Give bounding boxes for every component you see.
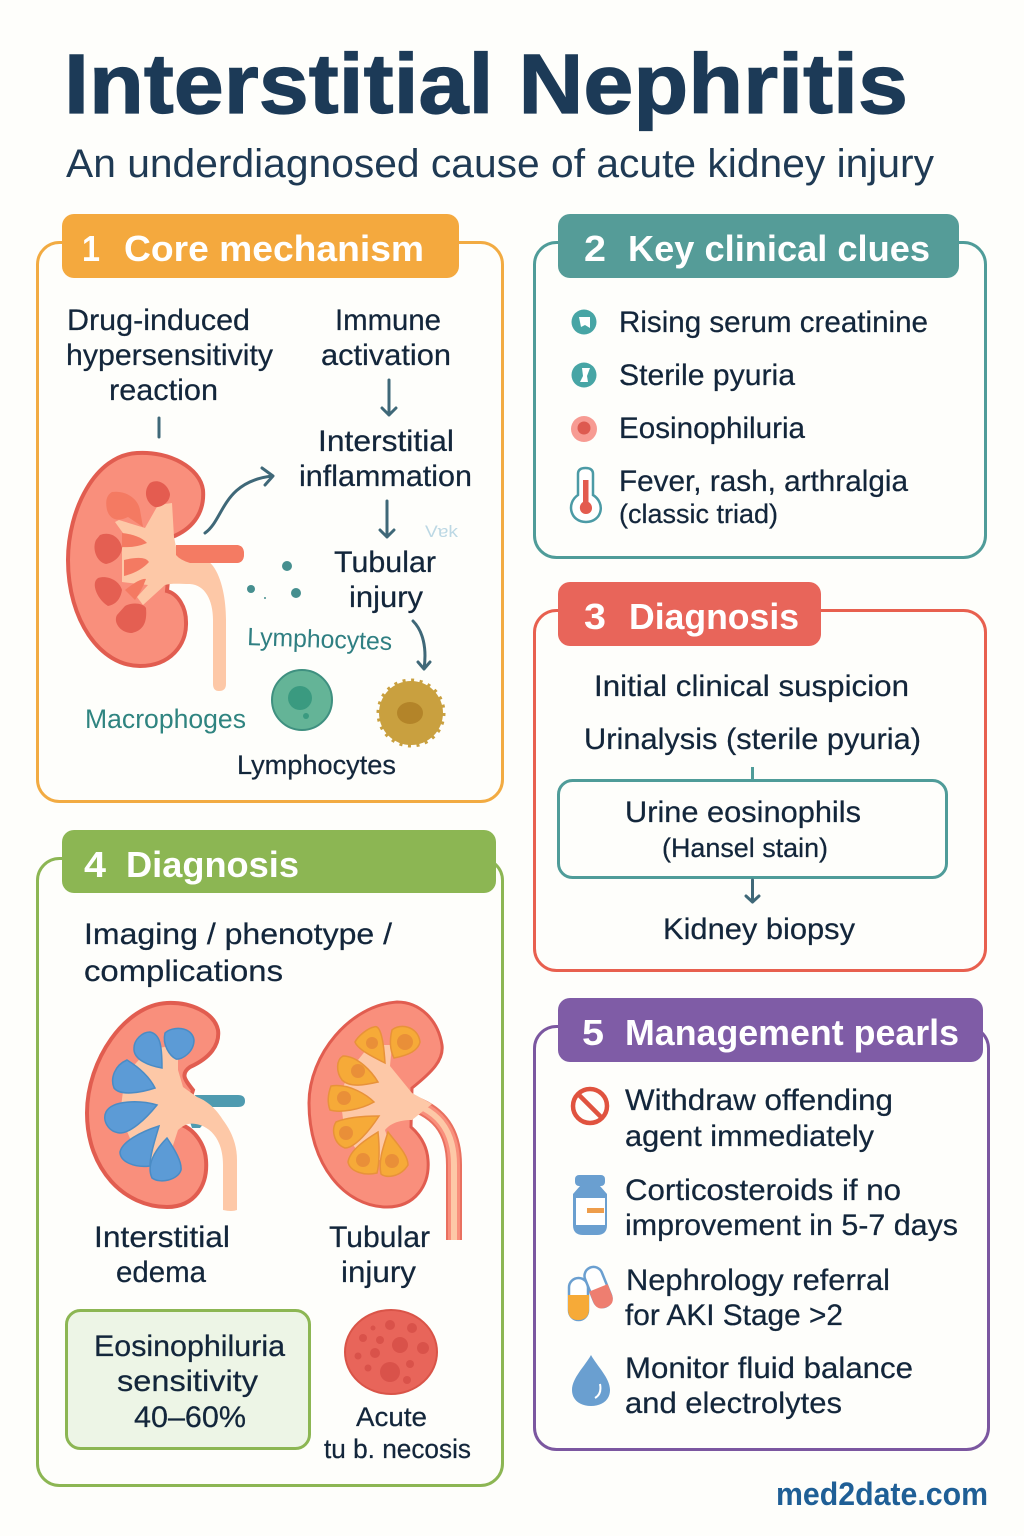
label: interstitial edema: edema <box>116 1256 206 1289</box>
text: imaging phenotype complications: complications <box>84 955 283 988</box>
panel: core mechanism <box>38 214 502 802</box>
icon: water drop <box>572 1355 610 1406</box>
heading: core mechanism: 1 <box>82 228 100 269</box>
label: acute tubular necrosis: tu b. necosis <box>324 1434 471 1464</box>
heading: management pearls <box>558 998 983 1062</box>
icon: thermometer <box>571 468 601 522</box>
clue: fever, rash, arthralgia: (classic triad) <box>619 499 778 529</box>
heading: diagnosis <box>62 830 496 893</box>
label: tubular injury: Tubular <box>329 1221 430 1254</box>
pearl: monitor fluid balance: and electrolytes <box>625 1387 842 1420</box>
connector stroke <box>751 767 754 780</box>
heading: diagnosis: Diagnosis <box>629 596 799 637</box>
clue: fever, rash, arthralgia: Fever, rash, arthralgia <box>619 465 908 498</box>
pearl: corticosteroids: Corticosteroids if no <box>625 1174 901 1207</box>
icon: medicine bottle <box>573 1175 607 1235</box>
text: drug-induced hypersensitivity reaction: hypersensitivity <box>66 339 273 372</box>
panel: management pearls <box>534 998 988 1450</box>
heading: core mechanism <box>62 214 459 278</box>
illustration: kidney with interstitial edema <box>87 1003 245 1211</box>
label: tubular injury: injury <box>341 1256 416 1289</box>
icon: spiky cell <box>378 680 444 746</box>
text: drug-induced hypersensitivity reaction: Drug-induced <box>67 304 250 337</box>
clue: fever, rash, arthralgia <box>619 465 908 529</box>
pearl: withdraw offending agent: agent immediately <box>625 1120 874 1153</box>
label: lymphocytes teal: Lymphocytes <box>247 623 393 656</box>
step: kidney biopsy: Kidney biopsy <box>663 913 855 946</box>
text: drug-induced hypersensitivity reaction: reaction <box>109 374 218 407</box>
step box: urine eosinophils: (Hansel stain) <box>662 833 828 863</box>
heading: key clinical clues: 2 <box>584 228 606 269</box>
icon: green cell <box>272 670 332 730</box>
arrow: inflammation to tubular injury <box>380 501 394 537</box>
callout: eosinophiluria sensitivity: 40–60% <box>134 1401 246 1434</box>
subtitle: An underdiagnosed cause of acute kidney injury <box>66 142 934 186</box>
text: imaging phenotype complications <box>84 918 393 988</box>
heading: management pearls: 5 <box>582 1012 604 1053</box>
step: initial clinical suspicion: Initial clinical suspicion <box>594 670 909 703</box>
heading: key clinical clues: Key clinical clues <box>628 228 930 269</box>
connector stroke <box>158 418 160 437</box>
arrow: kidney to inflammation <box>205 468 273 533</box>
panel: diagnosis pathway <box>534 582 986 970</box>
pearl: corticosteroids <box>625 1174 958 1242</box>
heading: diagnosis: 3 <box>584 596 606 637</box>
heading: diagnosis <box>558 582 821 646</box>
text: imaging phenotype complications: Imaging / phenotype / <box>84 918 393 951</box>
heading: management pearls: Management pearls <box>625 1012 959 1053</box>
text: immune activation: activation <box>321 339 451 372</box>
label: lymphocytes: Lymphocytes <box>237 750 396 780</box>
label: interstitial edema: Interstitial <box>94 1221 230 1254</box>
text: interstitial inflammation <box>299 425 472 493</box>
callout: eosinophiluria sensitivity: Eosinophiluria <box>94 1330 285 1363</box>
illustration: necrotic tubule cell <box>345 1310 437 1394</box>
arrow: activation to inflammation <box>382 380 396 415</box>
text: immune activation: Immune <box>335 304 441 337</box>
icon: teal badge <box>572 310 596 334</box>
step box: urine eosinophils <box>558 780 946 878</box>
callout: eosinophiluria sensitivity: sensitivity <box>117 1365 258 1398</box>
clue: eosinophiluria: Eosinophiluria <box>619 412 805 445</box>
clue: sterile pyuria: Sterile pyuria <box>619 359 795 392</box>
text: tubular injury <box>334 546 436 614</box>
label: acute tubular necrosis: Acute <box>356 1402 427 1432</box>
arrow: tubular injury to cell <box>413 621 430 669</box>
faint label artifact: Vɐk <box>425 522 459 541</box>
pearl: corticosteroids: improvement in 5-7 days <box>625 1209 958 1242</box>
pearl: withdraw offending agent <box>625 1084 893 1153</box>
panel: imaging and complications <box>38 830 502 1486</box>
text: tubular injury: Tubular <box>334 546 436 579</box>
heading: diagnosis: 4 <box>84 844 106 885</box>
panel: key clinical clues <box>534 214 986 558</box>
arrow: to kidney biopsy <box>746 880 759 902</box>
pearl: monitor fluid balance <box>625 1352 913 1420</box>
heading: key clinical clues <box>558 214 959 278</box>
step: urinalysis: Urinalysis (sterile pyuria) <box>584 723 921 756</box>
text: immune activation <box>321 304 451 372</box>
icon: capsules <box>568 1264 616 1320</box>
label: tubular injury <box>329 1221 430 1289</box>
illustration: kidney <box>68 453 244 691</box>
source: med2date.com: med2date.com <box>776 1476 988 1512</box>
text: interstitial inflammation: Interstitial <box>318 425 454 458</box>
heading: diagnosis: Diagnosis <box>126 844 299 885</box>
heading: core mechanism: Core mechanism <box>124 228 424 269</box>
pearl: nephrology referral: Nephrology referral <box>626 1264 890 1297</box>
title: Interstitial Nephritis <box>64 37 908 131</box>
text: interstitial inflammation: inflammation <box>299 460 472 493</box>
immune cell dots <box>247 561 301 599</box>
illustration: kidney with tubular injury <box>309 1002 454 1240</box>
pearl: monitor fluid balance: Monitor fluid balance <box>625 1352 913 1385</box>
icon: prohibition sign <box>573 1089 607 1123</box>
pearl: withdraw offending agent: Withdraw offending <box>625 1084 893 1117</box>
text: tubular injury: injury <box>349 581 423 614</box>
label: acute tubular necrosis <box>324 1402 471 1464</box>
pearl: nephrology referral <box>625 1264 890 1332</box>
label: macrophoges: Macrophoges <box>85 704 246 734</box>
text: drug-induced hypersensitivity reaction <box>66 304 273 407</box>
icon: teal badge <box>572 362 596 388</box>
icon: red cell <box>571 416 597 442</box>
pearl: nephrology referral: for AKI Stage >2 <box>625 1299 843 1332</box>
label: interstitial edema <box>94 1221 230 1289</box>
step box: urine eosinophils: Urine eosinophils <box>625 796 861 829</box>
callout: eosinophiluria sensitivity <box>66 1310 310 1448</box>
clue: rising serum creatinine: Rising serum creatinine <box>619 306 928 339</box>
